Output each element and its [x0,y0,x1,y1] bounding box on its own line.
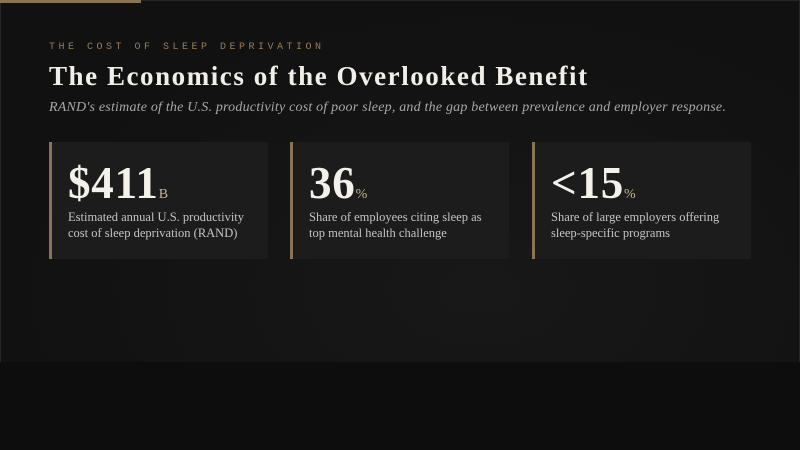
description: Share of large employers offering sleep-specific programs [551,210,719,240]
card: 411B [49,142,268,259]
stat: 36% [309,158,368,208]
description: Estimated annual U.S. productivity cost of sleep deprivation (RAND) [68,210,244,240]
title: The Economics of the Overlooked Benefit [49,61,589,91]
stat: <15% [551,158,637,208]
card: <15% [532,142,751,259]
subtitle: RAND's estimate of the U.S. productivity cost of poor sleep, and the gap between prevalence and employer response. [49,100,726,115]
card: 36% [290,142,509,259]
description: Share of employees citing sleep as top mental health challenge [309,210,482,240]
accent bar [0,0,141,3]
kicker: THE COST OF SLEEP DEPRIVATION [49,42,325,53]
stat: $411B [68,158,169,208]
